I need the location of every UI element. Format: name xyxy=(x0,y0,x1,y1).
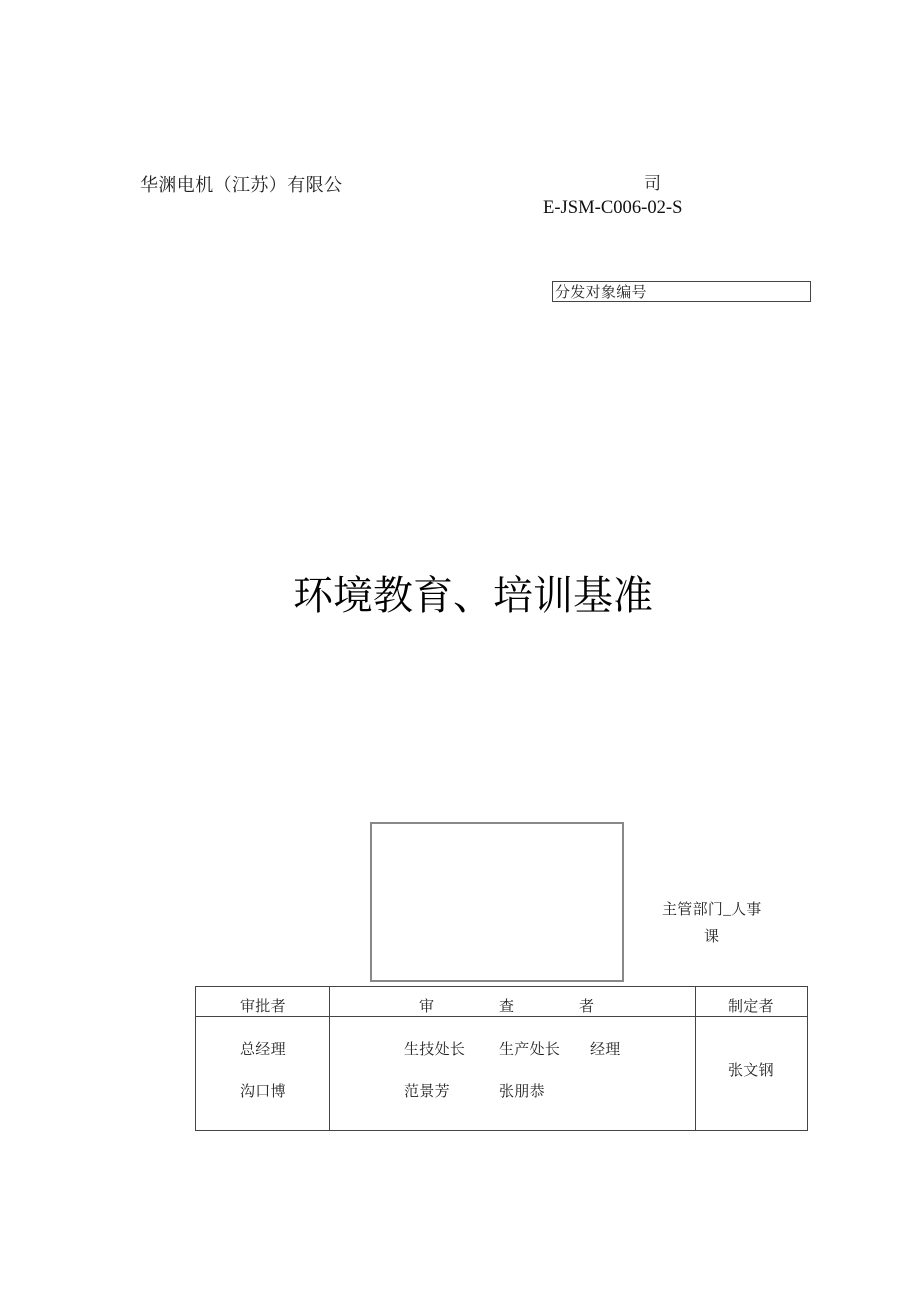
reviewer header middle: 查 xyxy=(499,999,514,1015)
approver title: 总经理 xyxy=(240,1042,286,1058)
author name: 张文钢 xyxy=(728,1063,774,1079)
approver name: 沟口博 xyxy=(240,1084,286,1100)
distribution number label: 分发对象编号 xyxy=(555,285,647,301)
stamp box xyxy=(370,822,624,982)
approver header: 审批者 xyxy=(240,999,286,1015)
distribution number box xyxy=(552,281,811,302)
company name last character: 司 xyxy=(644,174,661,193)
document number: E-JSM-C006-02-S xyxy=(543,197,682,218)
company name: 华渊电机（江苏）有限公 xyxy=(140,175,342,195)
department line two: 课 xyxy=(704,929,719,945)
reviewer name one: 范景芳 xyxy=(404,1084,450,1100)
approval table xyxy=(195,986,808,1131)
reviewer title one: 生技处长 xyxy=(404,1042,465,1058)
reviewer header: 审 xyxy=(419,999,434,1015)
responsible department xyxy=(662,901,762,945)
reviewer name two: 张朋恭 xyxy=(499,1084,545,1100)
reviewer title three: 经理 xyxy=(590,1042,621,1058)
reviewer title two: 生产处长 xyxy=(499,1042,560,1058)
author header: 制定者 xyxy=(728,999,774,1015)
title: 环境教育、培训基准 xyxy=(293,573,653,618)
reviewer header end: 者 xyxy=(579,999,594,1015)
department line one: 主管部门_人事 xyxy=(662,902,762,918)
